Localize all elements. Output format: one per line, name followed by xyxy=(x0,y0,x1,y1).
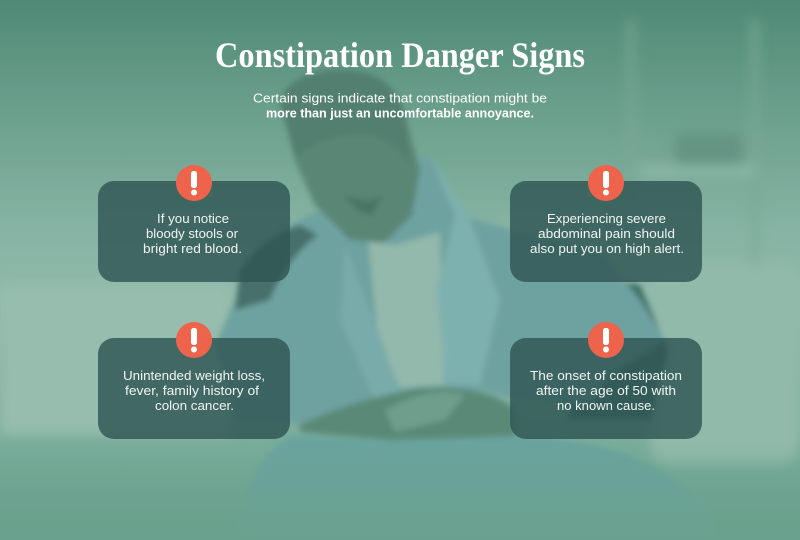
card: abdominal pain xyxy=(510,165,702,282)
card: abdominal pain: Experiencing severe xyxy=(547,212,666,226)
card: bloody stools: bright red blood. xyxy=(143,242,242,256)
card: bloody stools: If you notice xyxy=(157,212,229,226)
card: bloody stools: bloody stools or xyxy=(146,227,238,241)
subtitle xyxy=(253,92,547,120)
card: abdominal pain: abdominal pain should xyxy=(538,227,675,241)
card: weight loss and fever: colon cancer. xyxy=(155,399,234,413)
card: onset after 50 xyxy=(510,322,702,439)
card: bloody stools xyxy=(98,165,290,282)
card: onset after 50: after the age of 50 with xyxy=(536,384,676,398)
card: onset after 50: no known cause. xyxy=(557,399,655,413)
subtitle: more than just an uncomfortable annoyance. xyxy=(266,106,534,120)
card: onset after 50: The onset of constipation xyxy=(530,369,682,383)
card: weight loss and fever: fever, family history of xyxy=(125,384,260,398)
card: abdominal pain: also put you on high alert. xyxy=(530,242,684,256)
title: Constipation Danger Signs xyxy=(215,35,585,75)
card: weight loss and fever xyxy=(98,322,290,439)
card: weight loss and fever: Unintended weight loss, xyxy=(123,369,265,383)
subtitle: Certain signs indicate that constipation might be xyxy=(253,92,547,106)
